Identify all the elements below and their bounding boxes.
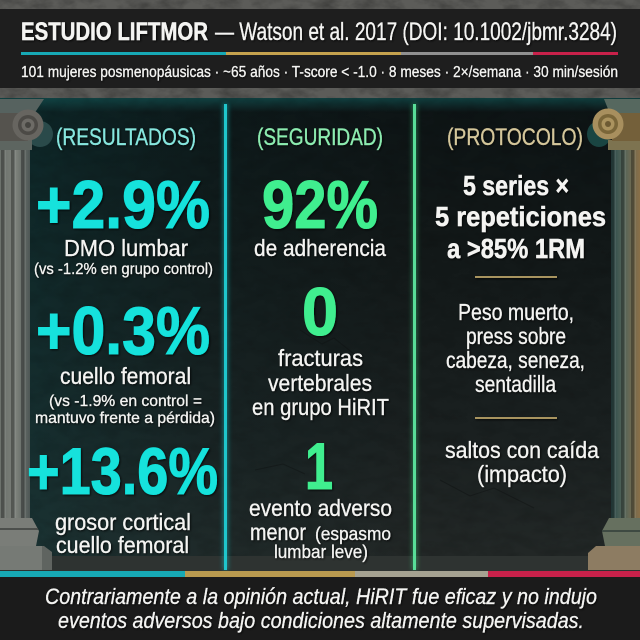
column dividers: [223, 104, 417, 570]
exercises: Peso muerto,: [458, 299, 574, 325]
title: [21, 18, 617, 46]
footer panel: [0, 577, 640, 640]
stat: +0.3% cuello femoral: +0.3%: [36, 293, 210, 369]
header panel: [0, 9, 640, 88]
stat: +0.3% cuello femoral: mantuvo frente a pérdida): [35, 410, 215, 427]
stat: 1 evento adverso: lumbar leve): [274, 542, 368, 562]
stat: +13.6% grosor cortical: +13.6%: [27, 434, 218, 508]
protocol dose: 5 repeticiones: [435, 201, 606, 232]
stat: 0 fracturas: 0: [302, 274, 338, 350]
exercises: sentadilla: [475, 371, 556, 397]
heading: resultados: (RESULTADOS): [56, 124, 196, 151]
left pillar: [0, 99, 53, 570]
stat: 0 fracturas: en grupo HiRIT: [252, 394, 389, 420]
panel: seguridad: [249, 124, 392, 562]
stat: +0.3% cuello femoral: cuello femoral: [60, 363, 191, 389]
stat: 0 fracturas: vertebrales: [268, 370, 372, 396]
stat: +0.3% cuello femoral: (vs -1.9% en control =: [49, 393, 202, 410]
header colour rule: [21, 52, 618, 55]
stat: +2.9% DMO lumbar: DMO lumbar: [64, 235, 188, 261]
title: ESTUDIO LIFTMOR: [21, 18, 208, 46]
panel: resultados: [27, 124, 218, 558]
stat: +0.3% cuello femoral: [35, 293, 215, 427]
stat: 1 evento adverso: (espasmo: [315, 524, 391, 544]
stat: 0 fracturas: fracturas: [278, 345, 363, 371]
protocol dose: 5 series ×: [463, 170, 569, 201]
exercises: press sobre: [466, 323, 566, 349]
bottom colour rule: [0, 571, 640, 577]
stat: 92% adherencia: de adherencia: [254, 235, 386, 261]
stat: +13.6% grosor cortical: [27, 434, 218, 558]
stat: +2.9% DMO lumbar: [34, 167, 213, 278]
protocol dose: [435, 170, 606, 264]
stat: 1 evento adverso: evento adverso: [249, 495, 392, 521]
stat: 92% adherencia: 92%: [262, 167, 378, 243]
exercises: [446, 299, 585, 397]
stat: +2.9% DMO lumbar: (vs -1.2% en grupo control): [34, 261, 213, 278]
stat: +2.9% DMO lumbar: +2.9%: [36, 167, 210, 243]
heading: seguridad: (SEGURIDAD): [257, 124, 383, 151]
impact jumps: [445, 437, 599, 487]
stat: 0 fracturas: [252, 274, 389, 420]
stat: 1 evento adverso: menor: [250, 519, 306, 545]
protocol dose: a >85% 1RM: [447, 233, 585, 264]
impact jumps: (impacto): [477, 461, 567, 487]
panel: protocolo: [435, 124, 606, 487]
impact jumps: saltos con caída: [445, 437, 599, 463]
stat: +13.6% grosor cortical: cuello femoral: [56, 532, 189, 558]
stat: +13.6% grosor cortical: grosor cortical: [55, 509, 191, 535]
heading: protocolo: (PROTOCOLO): [447, 124, 583, 151]
stat: 1 evento adverso: 1: [305, 429, 333, 503]
panel: wall background: [0, 98, 640, 571]
stat: 1 evento adverso: [249, 429, 392, 562]
exercises: cabeza, seneza,: [446, 347, 585, 373]
right pillar: [587, 99, 640, 570]
conclusion: [45, 584, 597, 633]
